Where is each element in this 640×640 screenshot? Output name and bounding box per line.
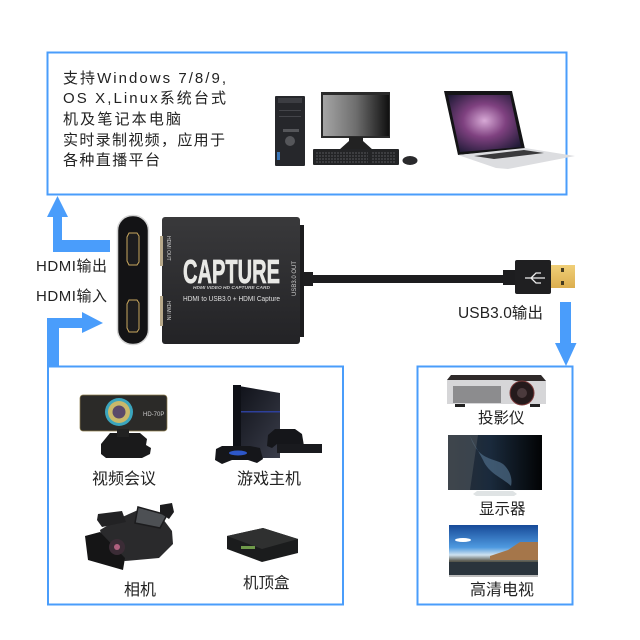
panel: output displays (418, 366, 572, 604)
arrow: HDMI out to computers (47, 196, 110, 252)
text: system support description: 各种直播平台 (63, 152, 160, 169)
capture card (160, 217, 313, 344)
icon: USB symbol (525, 273, 545, 283)
card title: CAPTURE (183, 253, 280, 290)
USB cable (302, 275, 515, 283)
icon: camcorder (85, 503, 174, 570)
label: HDMI in: HDMI输入 (36, 288, 107, 305)
USB plug (503, 260, 575, 294)
icon: game console (215, 385, 322, 464)
caption: game console: 游戏主机 (237, 470, 301, 488)
caption: HD TV: 高清电视 (470, 581, 534, 599)
arrow: HDMI in from sources (47, 312, 103, 366)
text: system support description: 实时录制视频，应用于 (63, 131, 225, 149)
caption: video conference: 视频会议 (92, 470, 156, 488)
card caption: HDMI to USB3.0 + HDMI Capture (183, 294, 280, 303)
text: system support description: 机及笔记本电脑 (63, 111, 181, 128)
card subtitle: HDMI VIDEO HD CAPTURE CARD (193, 285, 271, 290)
icon: desktop computer (275, 92, 418, 166)
label: HDMI out: HDMI输出 (36, 258, 107, 275)
text: system support description: OS X,Linux系统台式 (63, 90, 226, 107)
caption: camera: 相机 (124, 581, 156, 599)
label: USB3.0 output: USB3.0输出 (458, 304, 543, 322)
icon: HD TV (449, 525, 538, 577)
caption: projector: 投影仪 (478, 409, 525, 427)
port label: HDMI IN: HDMI IN (165, 301, 171, 321)
icon: webcam (80, 395, 167, 458)
icon: HDMI port plate (118, 216, 148, 344)
icon: monitor (448, 435, 542, 496)
caption: set-top box: 机顶盒 (243, 574, 290, 592)
text: system support description: 支持Windows 7/8/9, (63, 70, 226, 87)
icon: projector (447, 375, 546, 407)
text: system support description (63, 70, 226, 169)
panel: supported computers (48, 52, 575, 194)
icon: webcam: HD-70P (143, 412, 164, 418)
caption: monitor: 显示器 (479, 501, 526, 518)
arrow: USB output to displays (555, 302, 576, 366)
icon: laptop (444, 91, 575, 169)
icon: set-top box (227, 528, 298, 562)
port label: HDMI OUT: HDMI OUT (165, 236, 171, 261)
panel: input devices (48, 366, 343, 604)
port label: USB3.0 OUT: USB3.0 OUT (292, 261, 298, 296)
